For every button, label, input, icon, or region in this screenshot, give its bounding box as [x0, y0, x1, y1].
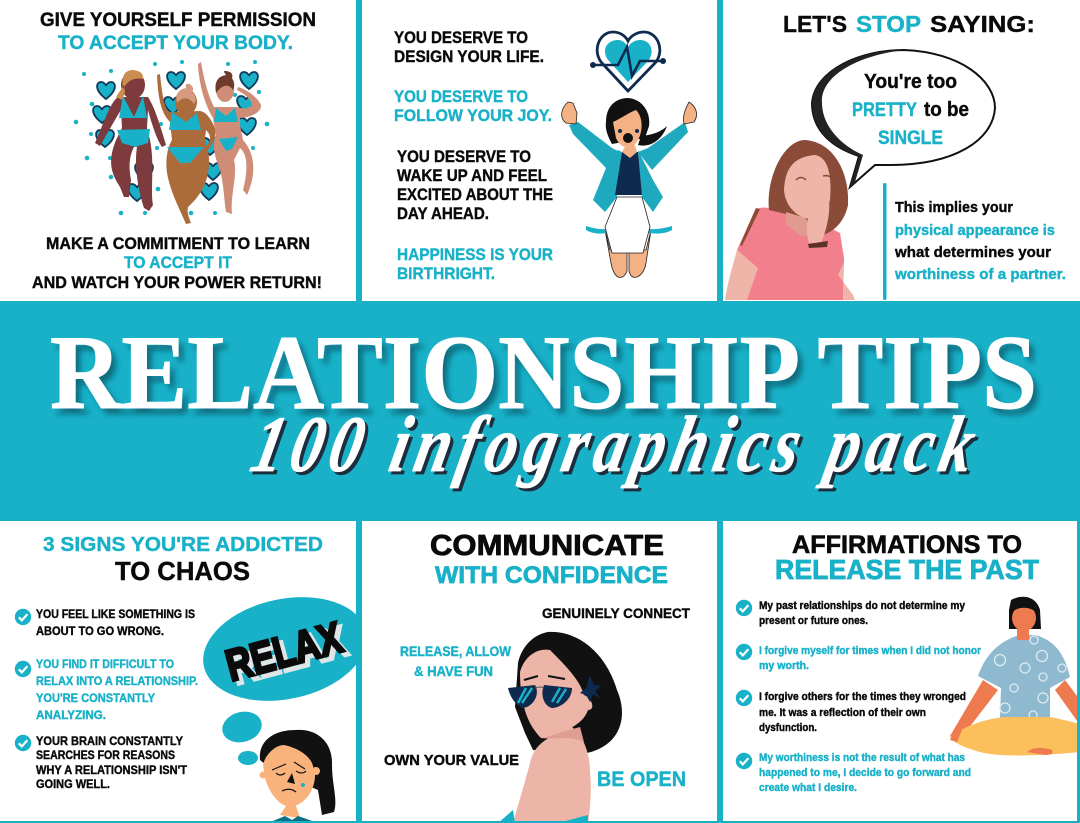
panel: you deserve: [394, 28, 697, 283]
relax thought bubble: RELAX: [221, 613, 347, 691]
text: you deserve list: HAPPINESS IS YOUR: [397, 245, 553, 264]
callout: implies text: This implies your: [895, 200, 1013, 216]
text: you deserve list: YOU DESERVE TO: [397, 147, 531, 166]
heading: let's stop saying: LET'S: [783, 11, 847, 37]
text: you deserve list: WAKE UP AND FEEL: [397, 166, 547, 185]
speech bubble: to be: [924, 99, 969, 121]
check list: SEARCHES FOR REASONS: [36, 748, 175, 762]
check list: YOU FIND IT DIFFICULT TO: [36, 657, 174, 671]
text: you deserve list: DAY AHEAD.: [397, 204, 489, 223]
banner: [0, 301, 1080, 521]
check list: YOUR BRAIN CONSTANTLY: [36, 734, 183, 748]
affirmations list: My worthiness is not the result of what has: [759, 752, 965, 764]
text: make a commitment: TO ACCEPT IT: [124, 254, 232, 272]
heading: communicate: COMMUNICATE: [430, 530, 664, 562]
affirmations list: [736, 600, 982, 794]
illustration: woman in sunglasses: [498, 632, 622, 823]
affirmations list: I forgive myself for times when I did not honor: [759, 645, 982, 657]
illustration: three dancing women with hearts: [74, 60, 269, 224]
relax thought bubble: RELAX: [226, 617, 353, 695]
affirmations list: dysfunction.: [759, 722, 817, 734]
illustration: worried woman: [260, 730, 335, 823]
text: you deserve list: [394, 28, 553, 283]
banner subtitle: 100 infographics pack: [244, 400, 983, 488]
callout: implies text: worthiness of a partner.: [894, 267, 1066, 283]
speech bubble: SINGLE: [878, 128, 943, 149]
text: you deserve list: YOU DESERVE TO: [394, 28, 528, 47]
illustration: jumping woman: [562, 98, 697, 277]
check list: GOING WELL.: [36, 777, 110, 791]
heading: affirmations: AFFIRMATIONS TO: [792, 531, 1022, 559]
affirmations list: me. It was a reflection of their own: [759, 707, 926, 719]
callout: implies text: physical appearance is: [895, 223, 1055, 239]
check list: [15, 607, 198, 791]
panel: communicate with confidence: [384, 530, 690, 823]
heading: let's stop saying: [783, 11, 1035, 37]
affirmations list: create what I desire.: [759, 782, 857, 794]
heading: addicted to chaos: TO CHAOS: [115, 556, 250, 586]
labels: communication tips: RELEASE, ALLOW: [400, 643, 512, 659]
check list: YOU'RE CONSTANTLY: [36, 691, 155, 705]
text: you deserve list: FOLLOW YOUR JOY.: [394, 106, 552, 125]
labels: communication tips: GENUINELY CONNECT: [542, 605, 690, 621]
relax thought bubble: [203, 597, 356, 765]
heading: affirmations: [775, 531, 1039, 585]
text: you deserve list: BIRTHRIGHT.: [397, 264, 495, 283]
woman right: [198, 62, 261, 214]
heading: let's stop saying: SAYING:: [930, 11, 1035, 37]
affirmations list: happened to me, I decide to go forward and: [759, 767, 971, 779]
callout: implies text: [883, 183, 1066, 300]
heading: let's stop saying: STOP: [856, 11, 921, 37]
illustration: woman resting on hand: [725, 140, 855, 300]
woman centre: [157, 74, 215, 224]
heading: addicted to chaos: [43, 533, 323, 586]
panel: signs addicted to chaos: [15, 533, 377, 823]
icon: heart with pulse line: [590, 32, 666, 91]
text: make a commitment: [32, 235, 322, 292]
banner subtitle: 100 infographics pack: [247, 403, 986, 491]
text: make a commitment: AND WATCH YOUR POWER RETURN!: [32, 274, 322, 292]
woman left: [95, 70, 166, 211]
text: you deserve list: DESIGN YOUR LIFE.: [394, 47, 544, 66]
heading: communicate: WITH CONFIDENCE: [435, 562, 668, 589]
text: you deserve list: YOU DESERVE TO: [394, 87, 528, 106]
affirmations list: My past relationships do not determine my: [759, 600, 966, 612]
heading: give yourself permission: [40, 9, 316, 54]
check list: ABOUT TO GO WRONG.: [36, 624, 164, 638]
check list: ANALYZING.: [36, 708, 106, 722]
speech bubble: [812, 50, 995, 187]
callout: implies text: what determines your: [894, 245, 1051, 261]
heading: give yourself permission: TO ACCEPT YOUR BODY.: [58, 32, 293, 54]
panel: let's stop saying: [725, 11, 1066, 300]
labels: communication tips: BE OPEN: [597, 767, 686, 791]
panel: affirmations: [736, 531, 1080, 794]
heading: communicate: [430, 530, 668, 589]
banner title: RELATIONSHIP TIPS: [50, 314, 1037, 431]
heading: give yourself permission: GIVE YOURSELF PERMISSION: [40, 9, 316, 31]
labels: communication tips: [384, 605, 690, 791]
speech bubble: You're too: [864, 71, 957, 93]
labels: communication tips: OWN YOUR VALUE: [384, 753, 519, 769]
panel: accept your body: [32, 9, 322, 292]
labels: communication tips: & HAVE FUN: [414, 663, 493, 679]
speech bubble: PRETTY: [852, 100, 917, 121]
check list: YOU FEEL LIKE SOMETHING IS: [36, 607, 195, 621]
illustration: meditating woman: [950, 597, 1080, 755]
heading: affirmations: RELEASE THE PAST: [775, 554, 1039, 585]
affirmations list: my worth.: [759, 660, 809, 672]
check list: WHY A RELATIONSHIP ISN'T: [36, 763, 188, 777]
check list: RELAX INTO A RELATIONSHIP.: [36, 674, 198, 688]
text: you deserve list: EXCITED ABOUT THE: [397, 185, 553, 204]
heading: addicted to chaos: 3 SIGNS YOU'RE ADDICTED: [43, 533, 323, 556]
text: make a commitment: MAKE A COMMITMENT TO LEARN: [46, 235, 310, 253]
affirmations list: present or future ones.: [759, 615, 868, 627]
affirmations list: I forgive others for the times they wronged: [759, 691, 966, 703]
